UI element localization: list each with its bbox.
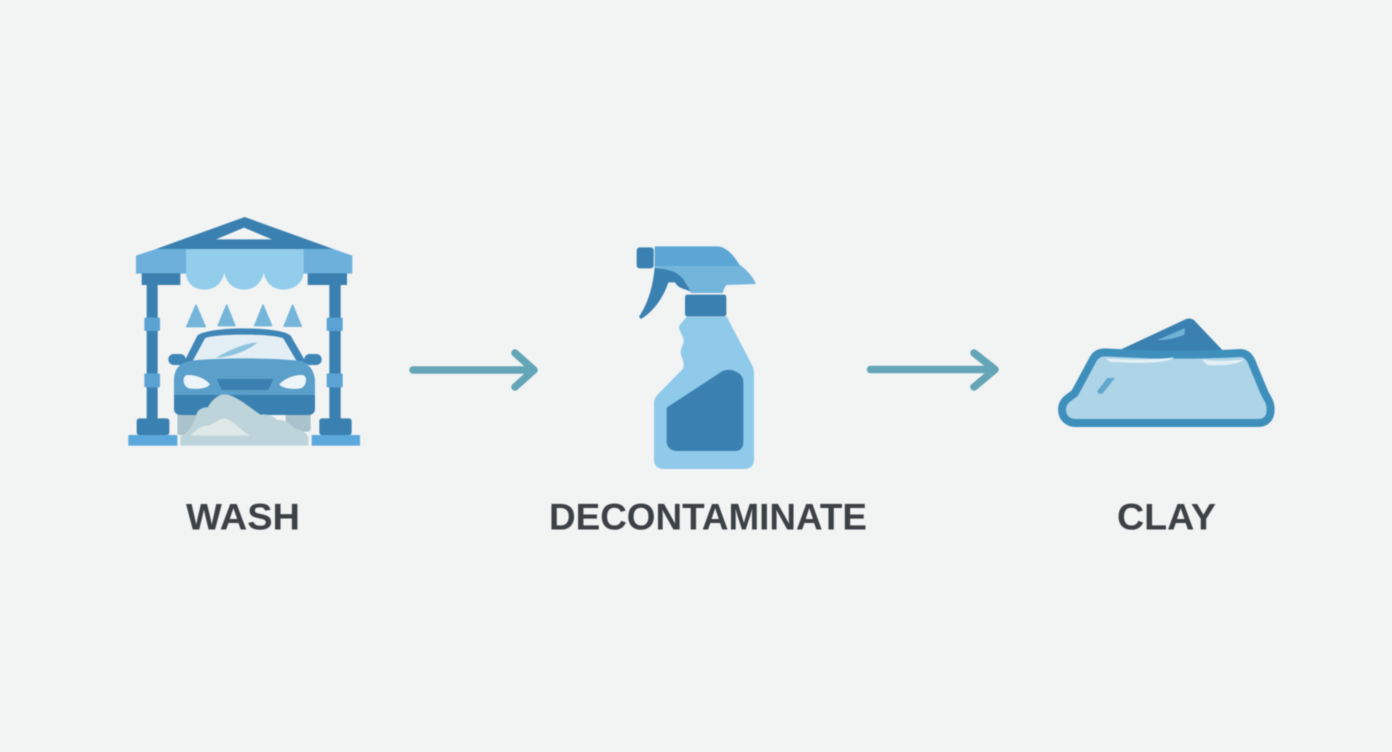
icon: car wash xyxy=(128,217,360,446)
car xyxy=(168,328,322,435)
back clay piece xyxy=(1121,320,1225,354)
label: wash: WASH xyxy=(186,496,300,538)
icon: clay bar xyxy=(1062,320,1271,423)
trigger xyxy=(639,267,692,319)
arrow: decontaminate to clay xyxy=(870,353,995,387)
nozzle cap xyxy=(637,247,654,268)
highlights xyxy=(1097,357,1244,394)
collar xyxy=(685,295,726,316)
right column xyxy=(308,273,360,446)
label: clay: CLAY xyxy=(1117,496,1216,538)
sprayer head xyxy=(655,246,756,293)
label xyxy=(667,370,743,451)
icon: spray bottle xyxy=(637,246,756,469)
left column xyxy=(128,273,180,446)
label: decontaminate: DECONTAMINATE xyxy=(549,496,867,538)
foam xyxy=(181,395,307,445)
bottle body xyxy=(654,317,754,469)
water drops xyxy=(187,305,301,327)
awning xyxy=(136,249,352,290)
roof xyxy=(156,217,333,249)
front clay bar xyxy=(1062,352,1271,423)
arrow: wash to decontaminate xyxy=(413,353,534,387)
